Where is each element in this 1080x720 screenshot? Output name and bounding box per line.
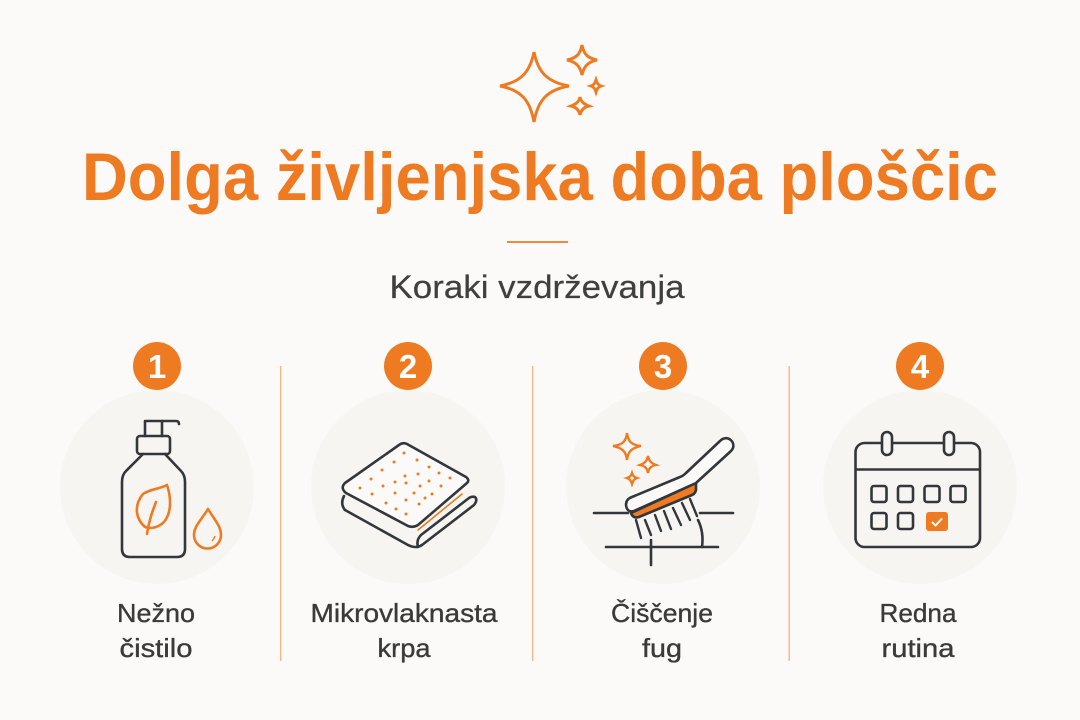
icon: brush — [626, 438, 733, 518]
icon: sparkles — [500, 45, 601, 122]
badge 2: 2 — [399, 348, 417, 385]
subtitle: Koraki vzdrževanja — [390, 269, 685, 305]
label 2: krpa — [378, 633, 431, 663]
panel: step 3 — [566, 342, 760, 663]
icon: small sparkles — [613, 433, 656, 484]
badge 2 — [384, 342, 432, 390]
label 1: Nežno — [117, 598, 195, 628]
panel: step 2 — [310, 342, 505, 663]
icon: drop — [194, 509, 221, 548]
label 4: Redna — [880, 598, 957, 628]
badge 1 — [133, 342, 181, 390]
title: Dolga življenjska doba ploščic — [82, 139, 998, 215]
label 3: Čiščenje — [611, 598, 713, 628]
badge 4: 4 — [911, 348, 930, 385]
dots pattern — [358, 452, 452, 516]
label 3: fug — [642, 633, 682, 663]
label 4: rutina — [882, 633, 955, 663]
label 1: čistilo — [120, 633, 192, 663]
icon: calendar — [856, 432, 980, 547]
icon: leaf — [137, 485, 170, 534]
badge 3 — [639, 342, 687, 390]
icon: bottle — [122, 421, 185, 557]
accent line — [507, 241, 568, 243]
badge 1: 1 — [148, 348, 166, 385]
icon: cloth — [342, 443, 476, 547]
badge 4 — [896, 342, 944, 390]
icon: tile lines — [594, 513, 733, 565]
panel: step 4 — [823, 342, 1017, 663]
panel: step 1 — [60, 342, 254, 663]
icon: brush bristles — [636, 499, 697, 538]
label 2: Mikrovlaknasta — [310, 598, 498, 628]
icon: checked day — [926, 512, 948, 531]
badge 3: 3 — [654, 348, 672, 385]
